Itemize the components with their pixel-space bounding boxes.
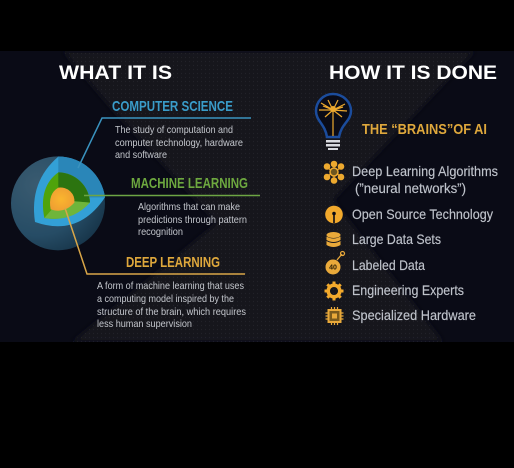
icon: label tag: 40 <box>329 264 337 272</box>
leader line: computer science <box>78 118 251 168</box>
item: deep learning algorithms: (”neural networks”) <box>355 180 466 196</box>
icon: neural network <box>324 161 344 183</box>
item: large data sets: Large Data Sets <box>352 231 441 247</box>
section: deep learning <box>97 254 246 330</box>
leader line: deep learning <box>65 208 245 274</box>
heading: how it is done: HOW IT IS DONE <box>329 62 497 84</box>
icon: database <box>326 232 340 247</box>
section: computer science: The study of computation and <box>115 124 233 136</box>
section: deep learning: DEEP LEARNING <box>126 254 220 271</box>
background panel <box>0 51 514 342</box>
item: engineering experts: Engineering Experts <box>352 282 464 298</box>
section: deep learning: a computing model inspired by the <box>97 293 234 305</box>
sphere diagram: nested layers of AI <box>11 156 105 250</box>
section: machine learning: MACHINE LEARNING <box>131 175 248 192</box>
item: labeled data <box>326 252 425 274</box>
section: deep learning: less human supervision <box>97 318 192 330</box>
heading: what it is: WHAT IT IS <box>59 62 172 84</box>
icon: light bulb with neuron <box>316 94 351 150</box>
section: computer science: computer technology, hardware <box>115 137 243 149</box>
section: machine learning: recognition <box>138 226 183 238</box>
item: open source technology: Open Source Technology <box>352 206 493 222</box>
section: computer science: COMPUTER SCIENCE <box>112 98 233 115</box>
section: deep learning: A form of machine learning that uses <box>97 280 244 292</box>
section: machine learning: predictions through pattern <box>138 214 247 226</box>
heading: the brains of AI: THE “BRAINS”OF AI <box>362 121 487 138</box>
item: specialized hardware <box>326 307 476 325</box>
section: deep learning: structure of the brain, which requires <box>97 306 246 318</box>
section: machine learning: Algorithms that can make <box>138 201 240 213</box>
section: computer science: and software <box>115 149 167 161</box>
leader line: machine learning <box>84 194 260 196</box>
section: computer science <box>112 98 243 161</box>
item: engineering experts <box>324 282 464 300</box>
icon: gear <box>324 282 344 300</box>
item: labeled data: Labeled Data <box>352 257 425 273</box>
icon: chip <box>326 307 344 325</box>
item: deep learning algorithms: Deep Learning Algorithms <box>352 163 498 179</box>
item: specialized hardware: Specialized Hardware <box>352 307 476 323</box>
section: machine learning <box>131 175 248 238</box>
icon: open source <box>325 206 343 223</box>
item: deep learning algorithms <box>324 161 498 196</box>
